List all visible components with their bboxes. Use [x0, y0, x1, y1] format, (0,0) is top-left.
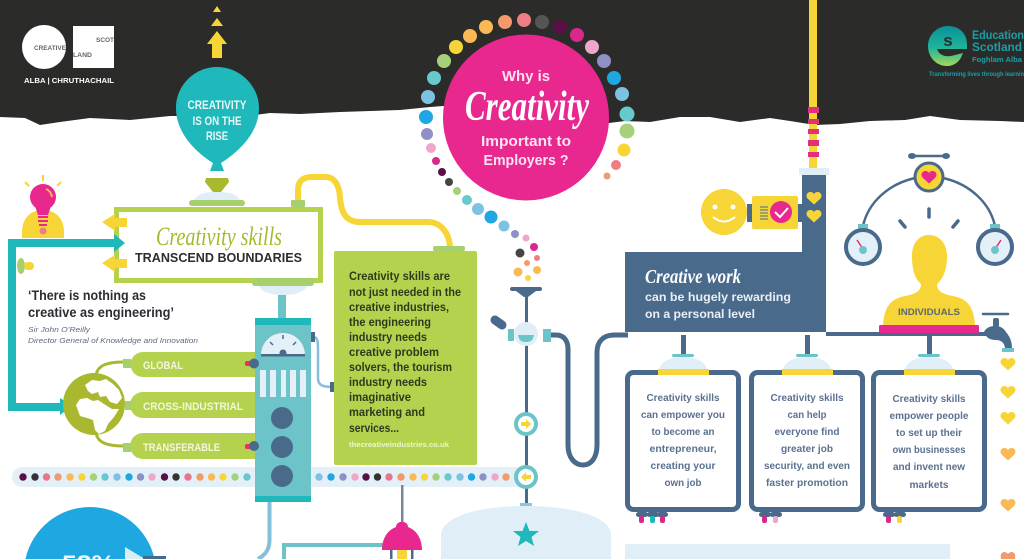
hearts column [1001, 358, 1015, 559]
card 1: entrepreneur: creating your [650, 461, 716, 472]
card 1: entrepreneur: Creativity skills [646, 393, 720, 404]
icon: rising yellow arrows [207, 6, 227, 58]
panel: creativity skills text: industry needs [349, 375, 427, 389]
pill: global: GLOBAL [143, 360, 183, 372]
panel: creative work [625, 175, 826, 332]
panel: creativity skills text: imaginative [349, 390, 411, 404]
pipe fittings [291, 200, 465, 251]
funnel and vertical pipe [510, 287, 542, 507]
icon: balloon valve [189, 178, 245, 206]
logo: Education Scotland: Scotland [972, 40, 1022, 54]
panel: creativity skills transcend boundaries: Creativity skills [156, 222, 282, 251]
panel: creativity skills text: marketing and [349, 405, 425, 419]
bottom light panel [625, 544, 950, 559]
yellow chimney pipe with pink bands [799, 0, 829, 175]
card 2: job security: greater job [781, 444, 833, 455]
icon: pink lamp [382, 485, 422, 559]
teal panel top, bottom edge [284, 545, 383, 559]
icons: yellow arrows into panel [102, 214, 127, 272]
tank with star [441, 503, 611, 559]
serpentine pipe to blue panel [551, 335, 628, 465]
logo: Creative Scotland: SCOT [96, 37, 114, 44]
panel: creativity skills text: services... [349, 421, 399, 435]
stat circle: 58% [26, 507, 166, 559]
card 3: own businesses: own businesses [892, 445, 966, 456]
yellow connecting pipe [298, 177, 450, 247]
quote [28, 287, 198, 345]
title circle: why is creativity important to employers: Creativity [465, 84, 589, 130]
card 1: entrepreneur [628, 335, 738, 523]
person: individuals: INDIVIDUALS [898, 307, 960, 318]
panel: creativity skills text: industry needs [349, 330, 427, 344]
card 2: job security: Creativity skills [770, 393, 844, 404]
icon: green nozzle [17, 258, 34, 274]
balloon: creativity is on the rise: RISE [206, 129, 228, 143]
logo: Creative Scotland: CREATIVE [34, 45, 67, 52]
small blue pipe from machine to text panel [311, 332, 335, 392]
title circle: why is creativity important to employers: Employers ? [484, 152, 568, 169]
card 1: entrepreneur: own job [664, 478, 702, 489]
card 3: own businesses: and invent new [893, 462, 965, 473]
pill: cross-industrial [125, 392, 258, 418]
card 2: job security: security, and even [764, 461, 850, 472]
panel: creativity skills text: creative problem [349, 345, 439, 359]
title circle: why is creativity important to employers: Important to [481, 133, 571, 150]
card 3: own businesses: empower people [890, 411, 969, 422]
card 3: own businesses: to set up their [896, 428, 962, 439]
logo: Education Scotland: s [943, 31, 953, 50]
logo: Creative Scotland: ALBA | CHRUTHACHAIL [24, 76, 114, 85]
title circle: why is creativity important to employers: Why is [502, 68, 550, 85]
icon: tap [983, 314, 1014, 352]
card 3: own businesses [874, 335, 984, 523]
panel: creativity skills text: not just needed in the [349, 285, 461, 299]
quote: Sir John O’Reilly [28, 325, 91, 334]
valve [495, 320, 551, 346]
logo: Education Scotland: Foghlam Alba [972, 55, 1023, 64]
panel: creativity skills text: creative industries, [349, 300, 449, 314]
title circle: why is creativity important to employers [443, 34, 609, 200]
icon: smiley with badge [701, 189, 802, 235]
logo: Education Scotland [928, 26, 1024, 78]
blue pipe below machine [258, 502, 270, 559]
dark torn header background [0, 0, 1024, 125]
quote: Director General of Knowledge and Innovation [28, 336, 198, 345]
dotted conveyor band [12, 467, 530, 487]
panel: creative work: Creative work [645, 266, 741, 288]
pill connectors to globe [96, 362, 124, 446]
pill: transferable: TRANSFERABLE [143, 442, 220, 454]
panel: creativity skills transcend boundaries [116, 210, 320, 280]
panel: creativity skills text: Creativity skills are [349, 269, 450, 283]
card 2: job security: faster promotion [766, 478, 848, 489]
hearts on chimney [807, 192, 821, 222]
card 3: own businesses: markets [910, 480, 949, 491]
icon: globe [63, 373, 125, 435]
panel: creativity skills text: solvers, the tourism [349, 360, 452, 374]
icon: lightbulb on yellow dome [22, 175, 64, 238]
panel: creative work: on a personal level [645, 307, 755, 321]
logo: Creative Scotland: LAND [73, 52, 92, 59]
card 2: job security: everyone find [774, 427, 840, 438]
balloon: creativity is on the rise: CREATIVITY [188, 98, 246, 112]
card 1: entrepreneur: to become an [652, 427, 714, 438]
conveyor dots [19, 473, 510, 481]
panel: creative work: can be hugely rewarding [645, 290, 791, 304]
panel: creativity skills transcend boundaries: TRANSCEND BOUNDARIES [135, 250, 302, 265]
panel: creativity skills text: the engineering [349, 315, 431, 329]
panel: creativity skills text: thecreativeindustries.co.uk [349, 440, 450, 449]
card 2: job security [752, 335, 862, 523]
ring with arrow [516, 414, 536, 434]
quote: ‘There is nothing as [28, 287, 146, 303]
pill: cross-industrial: CROSS-INDUSTRIAL [143, 401, 243, 413]
person: individuals [879, 235, 979, 333]
logo: Creative Scotland [22, 25, 114, 85]
panel: creativity skills text [334, 251, 477, 465]
icon: individuals control with gauges [846, 153, 1012, 264]
main horizontal pipe [826, 332, 986, 336]
ring with arrow on conveyor [516, 467, 536, 487]
quote: creative as engineering’ [28, 304, 174, 320]
pill: global [123, 352, 258, 377]
colored dot arc and trail [419, 13, 634, 281]
machine [245, 318, 311, 502]
balloon: creativity is on the rise [176, 67, 259, 171]
pill: transferable [123, 433, 258, 459]
teal arrow from panel to globe [8, 234, 125, 415]
machine top fitting [252, 278, 314, 318]
card 1: entrepreneur: entrepreneur, [650, 444, 717, 455]
card 2: job security: can help [788, 410, 826, 421]
card 3: own businesses: Creativity skills [892, 394, 966, 405]
card 1: entrepreneur: can empower you [641, 410, 725, 421]
balloon: creativity is on the rise: IS ON THE [192, 114, 242, 128]
